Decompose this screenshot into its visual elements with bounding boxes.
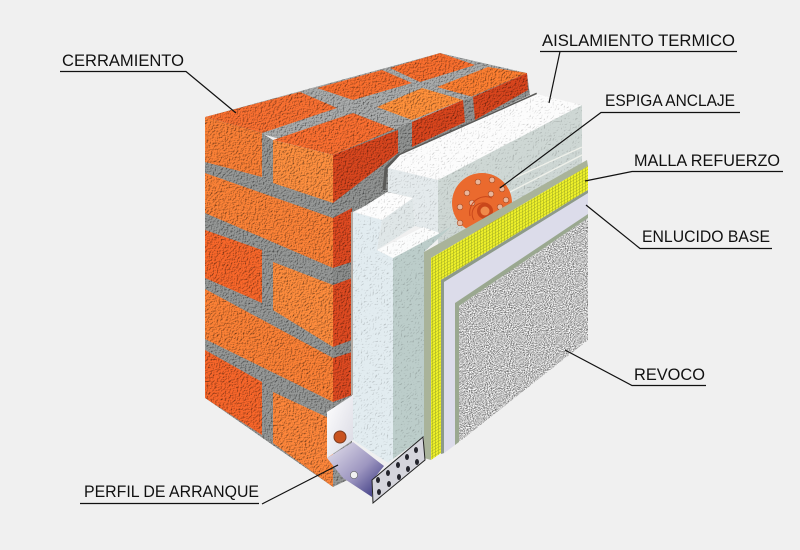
groove lines [510, 147, 582, 192]
label: REVOCO: REVOCO [634, 365, 705, 384]
plate hole [334, 431, 346, 443]
insulation boards: aislamiento termico [353, 94, 582, 463]
starter profile: perfil de arranque [327, 395, 425, 503]
wall top surface [205, 53, 527, 155]
label: REVOCO [565, 350, 706, 386]
vertical plate [327, 395, 353, 458]
dark gap behind insulation [384, 94, 537, 190]
label: ESPIGA ANCLAJE: ESPIGA ANCLAJE [605, 91, 735, 110]
anchor disc [452, 173, 512, 233]
label: PERFIL DE ARRANQUE: PERFIL DE ARRANQUE [84, 482, 259, 501]
wall right face [333, 73, 530, 402]
reinforcing mesh: malla refuerzo [424, 160, 588, 460]
anchor plug: espiga anclaje [452, 173, 512, 233]
render: revoco [455, 214, 588, 445]
base plate [327, 442, 384, 497]
label: CERRAMIENTO: CERRAMIENTO [62, 51, 184, 70]
label: ENLUCIDO BASE [586, 205, 772, 248]
front board [353, 192, 452, 463]
label: MALLA REFUERZO [585, 151, 783, 181]
label: AISLAMIENTO TERMICO [540, 31, 737, 103]
wall left face with mortar [205, 117, 352, 487]
label: CERRAMIENTO [60, 51, 236, 113]
label: MALLA REFUERZO: MALLA REFUERZO [634, 151, 780, 170]
label: PERFIL DE ARRANQUE [80, 465, 338, 504]
label: AISLAMIENTO TERMICO: AISLAMIENTO TERMICO [542, 31, 735, 50]
base plaster: enlucido base [441, 190, 588, 454]
label: ENLUCIDO BASE: ENLUCIDO BASE [642, 227, 770, 246]
back board [388, 94, 582, 270]
label: ESPIGA ANCLAJE [500, 91, 740, 188]
perforated edge [372, 437, 425, 503]
brick wall: cerramiento [205, 53, 537, 487]
